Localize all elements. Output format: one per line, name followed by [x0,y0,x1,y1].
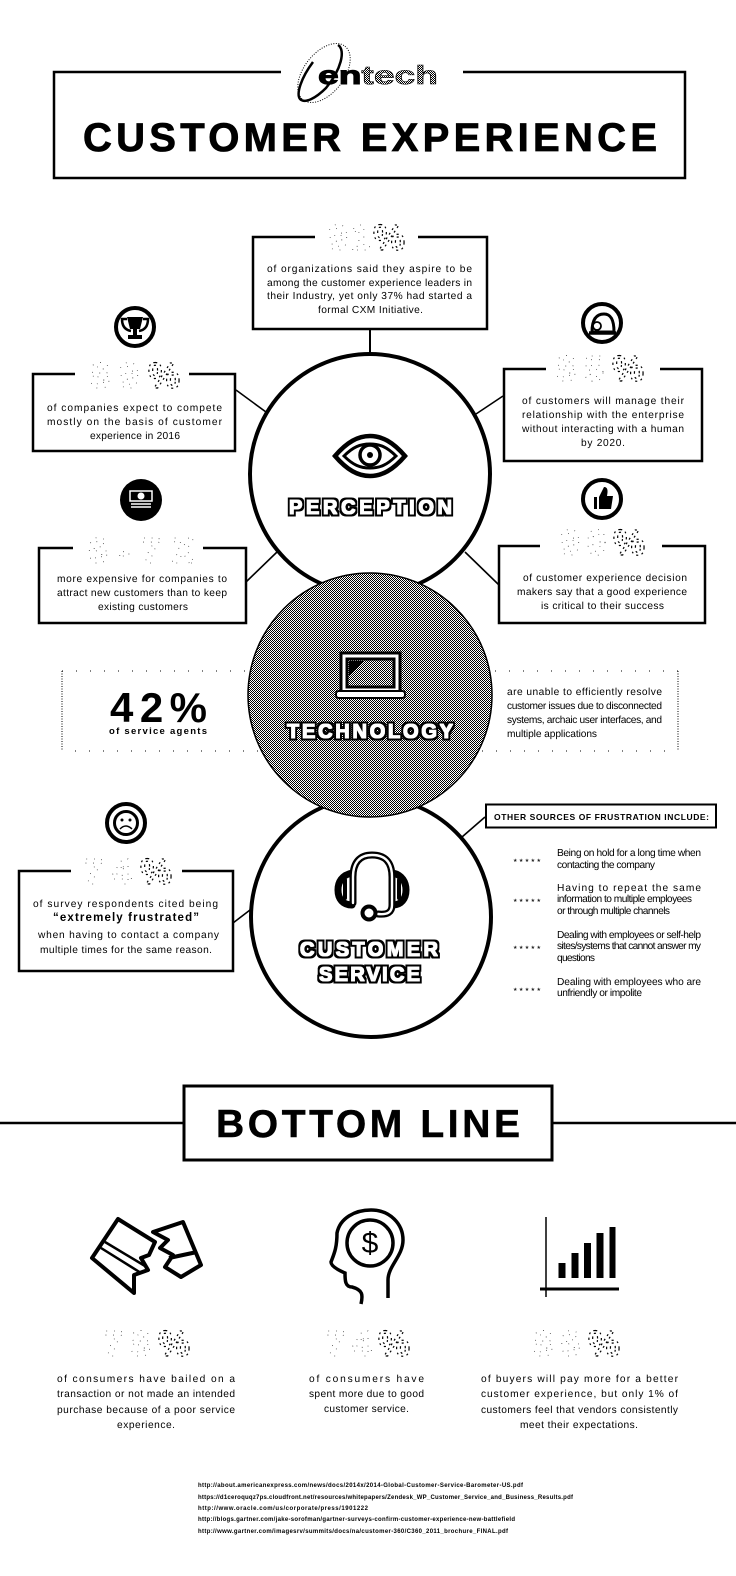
number: 85% [556,348,644,389]
connector lines [233,329,503,923]
list: ★★★★★ [513,945,542,951]
description: systems, archaic user interfaces, and [507,715,662,726]
description: of survey respondents cited being [33,899,218,910]
description: customer service. [324,1404,409,1415]
list: sites/systems that cannot answer my [557,941,702,952]
description: attract new customers than to keep [57,588,227,599]
description: experience. [117,1420,175,1431]
number: 6-7X [88,530,195,571]
stat: 78% [57,1219,235,1431]
description: of customer experience decision [523,573,687,584]
number: 42% [110,684,207,731]
description: customer experience, but only 1% of [481,1389,678,1400]
icon: broken credit card [92,1219,201,1293]
description: customer issues due to disconnected [507,701,662,712]
number: 74% [325,1323,410,1364]
logo: entech [287,34,438,112]
number: 78% [103,1323,190,1364]
icon: head with dollar [331,1210,403,1304]
list: ★★★★★ [513,858,542,864]
label: customer service: CUSTOMER [300,939,439,961]
description: transaction or not made an intended [57,1389,235,1400]
number: 90% [560,522,645,563]
number: 74% [83,851,172,892]
list: or through multiple channels [557,906,670,917]
description: among the customer experience leaders in [267,278,472,289]
description [33,899,220,956]
description [267,264,472,316]
bottom line heading: BOTTOM LINE [216,1103,520,1146]
icon: money [120,479,162,521]
description: is critical to their success [541,601,664,612]
list: Being on hold for a long time when [557,848,701,859]
sources: http://blogs.gartner.com/jake-sorofman/gartner-surveys-confirm-customer-experience-new-battlefield [198,1517,515,1523]
icon: eye [335,436,405,476]
description [57,574,227,613]
sources: http://www.oracle.com/us/corporate/press/1901222 [198,1506,369,1512]
icon: trophy [116,308,154,346]
caption: of service agents [109,726,207,737]
stat: 89% [33,308,235,451]
panel: other sources of frustration [486,804,716,999]
description: are unable to efficiently resolve [507,687,662,698]
description: by 2020. [581,438,625,449]
description: multiple times for the same reason. [40,945,212,956]
circle: technology [248,573,492,817]
description [57,1374,235,1431]
description: multiple applications [507,729,597,740]
description: of companies expect to compete [47,403,222,414]
description: of consumers have [309,1374,424,1385]
label: technology: TECHNOLOGY [287,721,454,743]
description: more expensive for companies to [57,574,227,585]
logo: entech: en tech [318,60,438,90]
stat: 6-7X [39,479,246,623]
description: existing customers [98,602,188,613]
number: 91% [328,217,405,258]
sources: http://about.americanexpress.com/news/docs/2014x/2014-Global-Customer-Service-Barometer-US.pdf [198,1483,524,1489]
panel heading: OTHER SOURCES OF FRUSTRATION INCLUDE: [494,812,709,822]
stat: 42% of service agents [62,671,678,751]
description [521,396,685,449]
icon: thumbs up [583,480,621,518]
description: spent more due to good [309,1389,424,1400]
description: purchase because of a poor service [57,1405,235,1416]
icon: headset [338,855,406,920]
title panel [54,34,685,178]
description: meet their expectations. [520,1420,638,1431]
label: perception: PERCEPTION [289,497,452,519]
description [309,1374,424,1415]
stat: 74% frustrated [19,804,233,971]
description: relationship with the enterprise [522,410,684,421]
stat: 86% [481,1217,679,1431]
list: information to multiple employees [557,894,692,905]
description: of consumers have bailed on a [57,1374,235,1385]
icon: bar chart [540,1217,619,1297]
description [517,573,687,612]
sources: http://www.gartner.com/imagesrv/summits/docs/na/customer-360/C360_2011_brochure_FINAL.pdf [198,1529,509,1535]
list: Dealing with employees or self-help [557,930,701,941]
description: their Industry, yet only 37% had started a [267,291,472,302]
icon: head with dollar: $ [362,1227,379,1260]
stat: 74% [309,1210,424,1415]
description [481,1374,679,1431]
list: contacting the company [557,860,656,871]
description: of buyers will pay more for a better [481,1374,679,1385]
list: ★★★★★ [513,898,542,904]
icon: house with chat [583,304,621,342]
description: formal CXM Initiative. [318,305,423,316]
sources [198,1483,574,1535]
stat: 85% [504,304,702,461]
circle: perception [250,354,490,594]
list: questions [557,953,595,964]
label: customer service [300,939,439,986]
description: when having to contact a company [37,930,220,941]
description: of organizations said they aspire to be [267,264,472,275]
description: of customers will manage their [522,396,685,407]
list: Having to repeat the same [557,883,701,894]
title heading: CUSTOMER EXPERIENCE [83,116,657,160]
description: experience in 2016 [90,431,180,442]
sources: https://d1ceroquqz7ps.cloudfront.net/resources/whitepapers/Zendesk_WP_Customer_Service_and_Business_Results.pdf [198,1495,574,1501]
label: customer service: SERVICE [319,964,420,986]
list [513,848,702,999]
stat: 90% [499,480,705,623]
list: unfriendly or impolite [557,988,642,999]
icon: laptop [336,653,405,698]
description: “extremely frustrated” [53,912,199,924]
number: 89% [90,355,180,396]
description: makers say that a good experience [517,587,687,598]
description: without interacting with a human [521,424,684,435]
description: customers feel that vendors consistently [481,1405,679,1416]
stat: 91% [253,217,487,329]
list: ★★★★★ [513,987,542,993]
description [507,687,662,740]
description: mostly on the basis of customer [47,417,223,428]
list: Dealing with employees who are [557,977,701,988]
circle: customer service [251,797,491,1037]
number: 86% [533,1323,620,1364]
bottom line heading [0,1086,736,1160]
icon: sad face [107,804,145,842]
description [47,403,223,442]
